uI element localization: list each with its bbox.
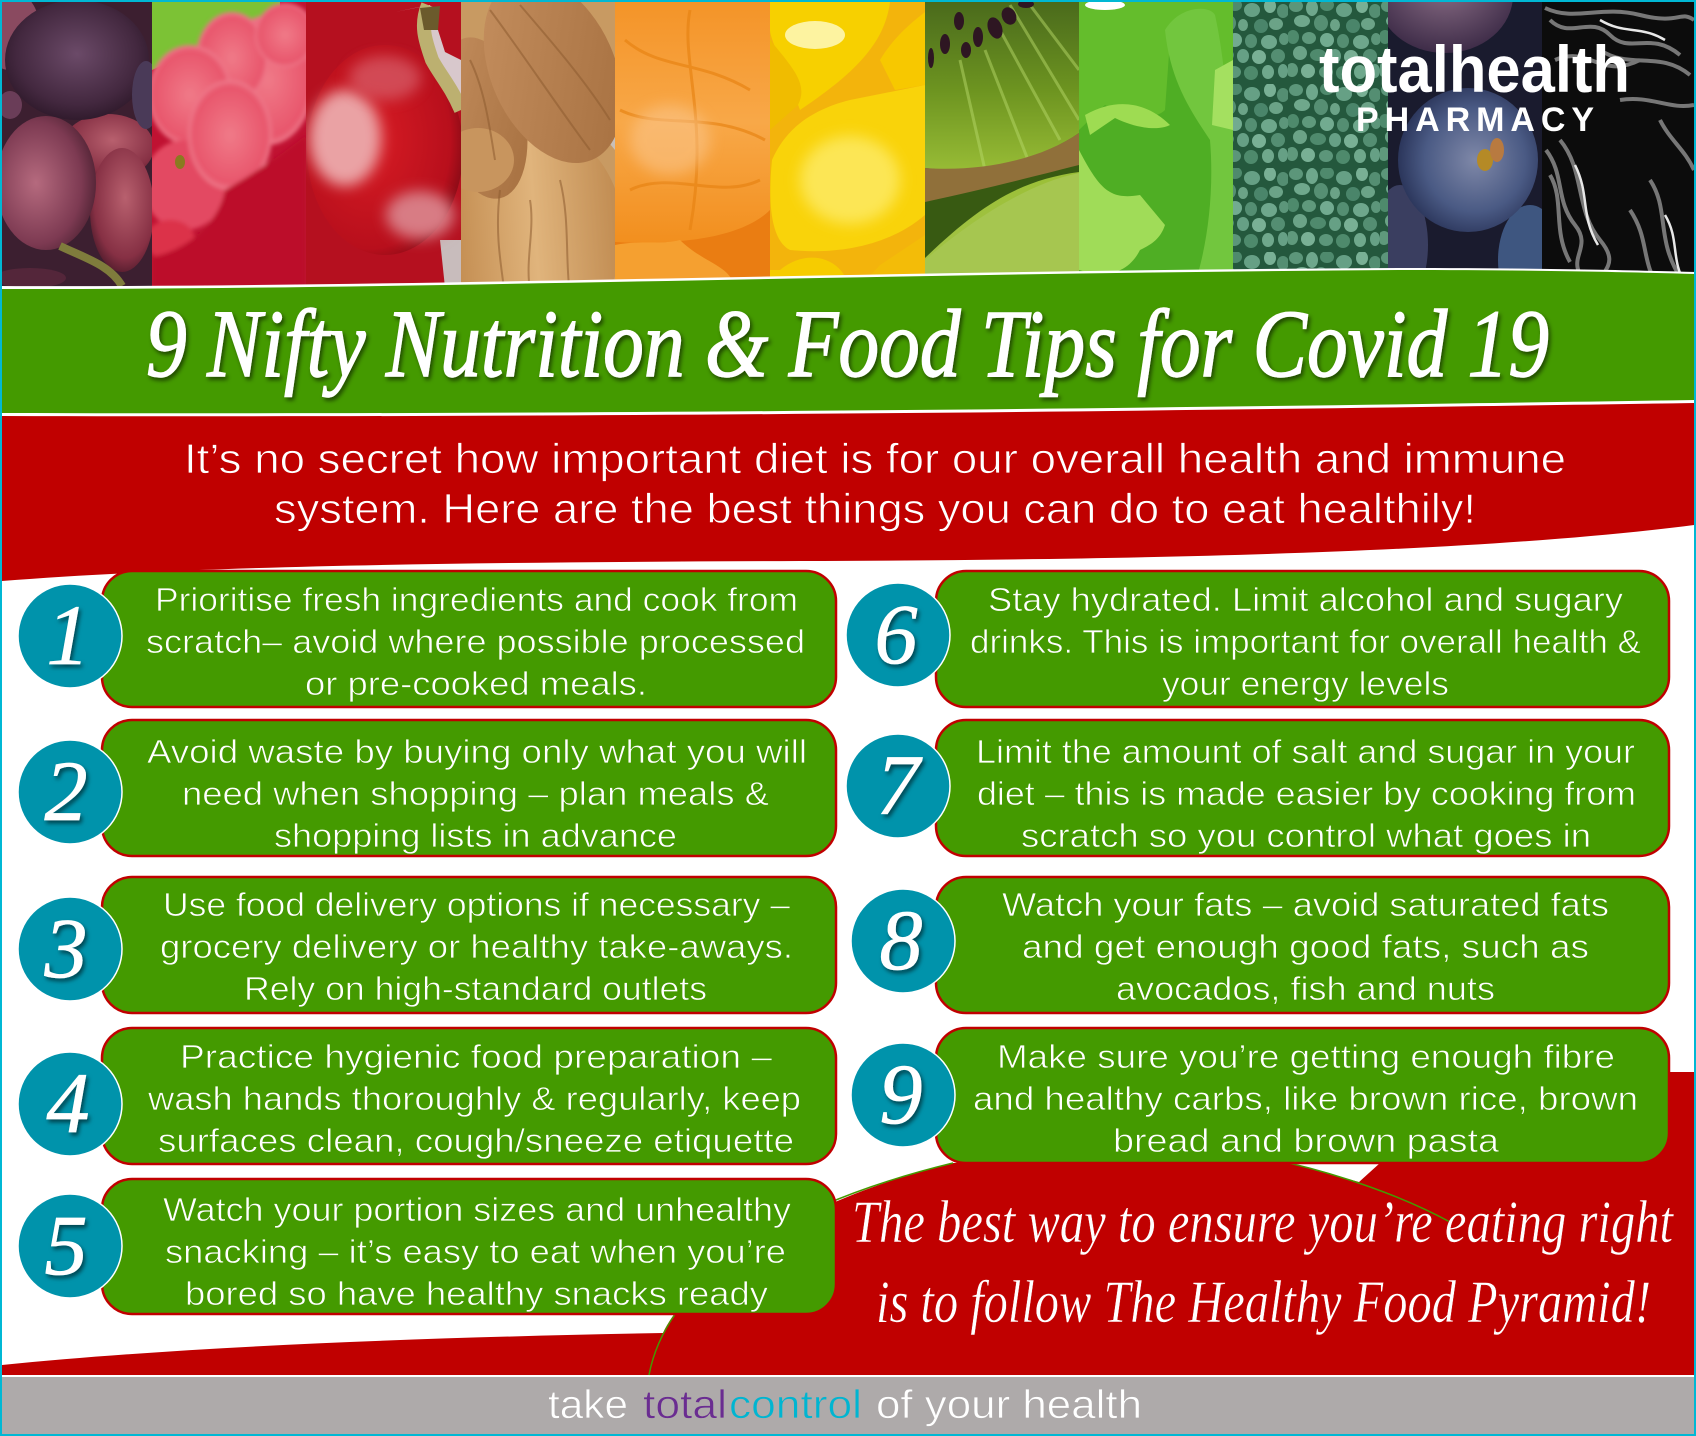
badge 2 [18, 740, 122, 844]
badge 7 [846, 734, 950, 838]
photo: dried apricots [615, 2, 770, 297]
tip 8 card [936, 877, 1669, 1013]
tips, right column [936, 571, 1669, 1163]
tip 9 card: bread and brown pasta [1113, 1122, 1500, 1159]
tip 1 card: scratch– avoid where possible processed [146, 623, 805, 660]
footer tagline: control [729, 1383, 862, 1427]
badge 9 [851, 1043, 955, 1147]
badge 3: 3 [44, 900, 88, 996]
badge 5: 5 [44, 1197, 88, 1293]
intro panel: red wave [2, 403, 1694, 581]
photo: almonds [461, 2, 615, 282]
tip 8 card: avocados, fish and nuts [1116, 970, 1495, 1007]
badge 9: 9 [880, 1046, 922, 1142]
badge 2: 2 [44, 743, 88, 839]
tip 5 card: Watch your portion sizes and unhealthy [163, 1191, 792, 1228]
intro text [184, 435, 1566, 532]
tip 7 card: Limit the amount of salt and sugar in your [976, 733, 1635, 770]
tip 7 card: diet – this is made easier by cooking from [977, 775, 1636, 812]
logo: Total Health Pharmacy [1319, 32, 1630, 139]
badge 3 [18, 897, 122, 1001]
tip 4 card: Practice hygienic food preparation – [180, 1038, 773, 1075]
tip 9 card: and healthy carbs, like brown rice, brown [973, 1080, 1638, 1117]
tip 8 card: and get enough good fats, such as [1022, 928, 1589, 965]
photo: red grapes [2, 2, 152, 286]
badge 8 [851, 889, 955, 993]
tip 4 card: surfaces clean, cough/sneeze etiquette [158, 1122, 794, 1159]
photo: cherries [306, 2, 463, 297]
badge 1: 1 [46, 587, 90, 683]
photo: prunes [1542, 2, 1694, 297]
tip 6 card [936, 571, 1669, 707]
tip 3 card: Rely on high-standard outlets [244, 970, 707, 1007]
photo: broccoli [1233, 2, 1388, 297]
badge 8: 8 [880, 892, 922, 988]
footer tagline: of your health [876, 1383, 1142, 1427]
tip 7 card [936, 720, 1669, 856]
photo banner: eleven food strips [2, 2, 1694, 286]
tip 7 card: scratch so you control what goes in [1021, 817, 1591, 854]
tip 1 card [102, 571, 836, 707]
badge 4 [18, 1052, 122, 1156]
tip 1 card: Prioritise fresh ingredients and cook from [155, 581, 798, 618]
tip 9 card [936, 1028, 1669, 1163]
tip 8 card: Watch your fats – avoid saturated fats [1002, 886, 1609, 923]
title banner: green wave [0, 268, 1696, 415]
badge 4: 4 [46, 1055, 90, 1151]
badge 6 [846, 583, 950, 687]
bottom red panel with arc [2, 1072, 1694, 1375]
photo: kiwi slice [925, 0, 1079, 297]
photo: raspberry [152, 2, 306, 286]
tip 3 card: Use food delivery options if necessary – [163, 886, 791, 923]
logo: Total Health Pharmacy: totalhealth [1319, 32, 1630, 106]
badge 6: 6 [874, 586, 918, 682]
logo: Total Health Pharmacy: PHARMACY [1356, 101, 1594, 139]
tip 2 card: Avoid waste by buying only what you will [147, 733, 807, 770]
badge 7: 7 [876, 737, 922, 833]
tip 5 card: snacking – it’s easy to eat when you’re [165, 1233, 786, 1270]
tip 6 card: your energy levels [1162, 665, 1449, 702]
intro text: system. Here are the best things you can do to eat healthily! [274, 485, 1476, 532]
tip 9 card: Make sure you’re getting enough fibre [997, 1038, 1615, 1075]
closing callout text [852, 1189, 1674, 1335]
tip 4 card [102, 1028, 836, 1164]
footer tagline: total [643, 1383, 727, 1427]
tip 4 card: wash hands thoroughly & regularly, keep [147, 1080, 801, 1117]
tips, left column [102, 571, 836, 1314]
tip 6 card: drinks. This is important for overall health & [970, 623, 1641, 660]
tip 5 card [102, 1179, 836, 1314]
badge 5 [18, 1194, 122, 1298]
photo: corn kernels [770, 2, 925, 297]
number badges [18, 583, 955, 1298]
photo: plums [1388, 2, 1542, 269]
footer tagline [548, 1383, 1142, 1427]
intro text: It’s no secret how important diet is for our overall health and immune [184, 435, 1566, 482]
tip 5 card: bored so have healthy snacks ready [185, 1275, 769, 1312]
tip 2 card [102, 720, 836, 856]
tip 3 card [102, 877, 836, 1013]
tip 6 card: Stay hydrated. Limit alcohol and sugary [988, 581, 1624, 618]
footer tagline: take [548, 1383, 628, 1427]
tip 2 card: need when shopping – plan meals & [182, 775, 769, 812]
tip 3 card: grocery delivery or healthy take-aways. [160, 928, 793, 965]
badge 1 [18, 584, 122, 688]
tip 2 card: shopping lists in advance [274, 817, 677, 854]
photo: green lettuce [1079, 0, 1233, 297]
tip 1 card: or pre-cooked meals. [305, 665, 647, 702]
footer bar [2, 1377, 1694, 1434]
